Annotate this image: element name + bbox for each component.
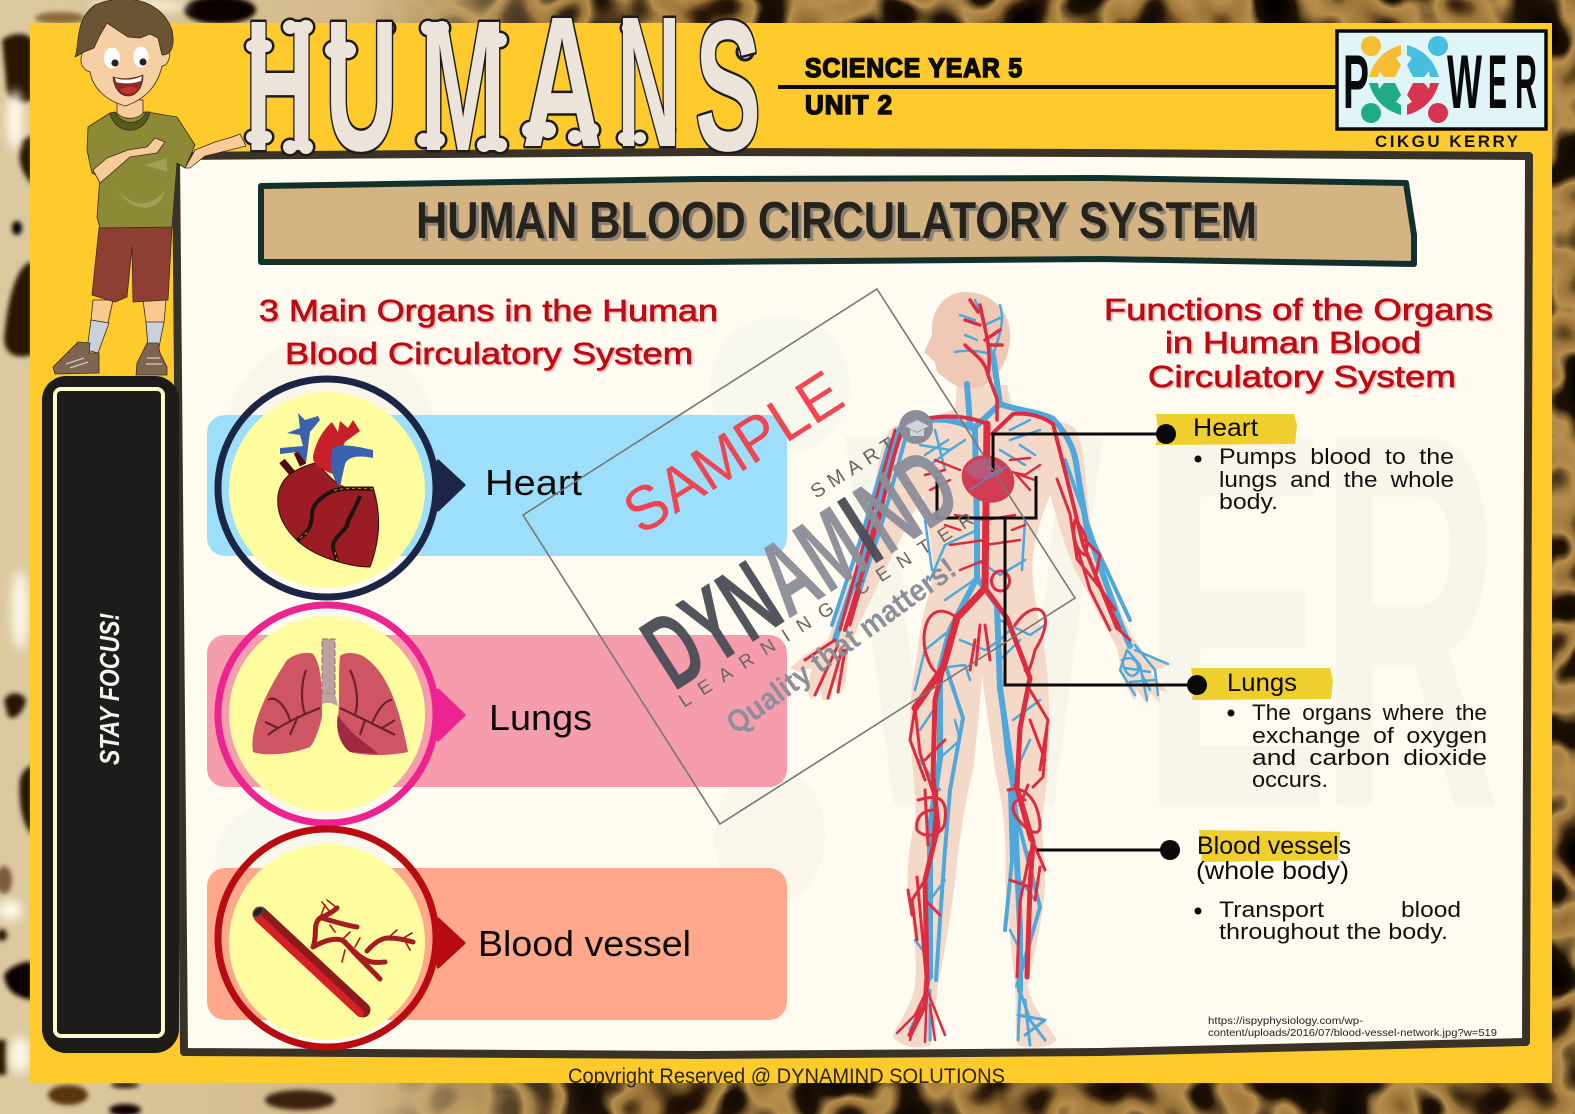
blood vessels description: Transport bbox=[1219, 897, 1325, 922]
blood vessels description bbox=[1219, 897, 1461, 944]
main cream panel bbox=[176, 152, 1529, 1055]
header: science year and unit bbox=[778, 53, 1338, 120]
function: heart bbox=[1156, 414, 1454, 514]
stamp: graduation cap badge bbox=[899, 410, 933, 444]
boy: collar bbox=[110, 112, 150, 130]
sidebar text: STAY FOCUS! bbox=[94, 613, 125, 765]
organ bars bbox=[207, 415, 787, 1020]
image source citation: content/uploads/2016/07/blood-vessel-network.jpg?w=519 bbox=[1208, 1027, 1497, 1039]
logo: four people ring bbox=[1361, 36, 1448, 123]
lungs description: exchange of oxygen bbox=[1252, 723, 1487, 748]
logo caption: CIKGU KERRY bbox=[1375, 132, 1519, 151]
banner title: HUMAN BLOOD CIRCULATORY SYSTEM bbox=[416, 192, 1257, 250]
boy: shirt bbox=[87, 112, 195, 228]
icon: lungs bbox=[252, 639, 408, 755]
head bbox=[924, 292, 1010, 389]
header rule bbox=[778, 85, 1338, 89]
heading: 3 main organs: 3 Main Organs in the Human bbox=[259, 293, 718, 328]
heading: functions of the organs: Circulatory System bbox=[1148, 359, 1456, 394]
boy: open mouth bbox=[113, 75, 143, 96]
blood vessels description: blood bbox=[1401, 897, 1461, 922]
heading: functions of the organs: in Human Blood bbox=[1165, 325, 1421, 360]
stamp: DYNAMIND: DYNAMIND bbox=[623, 426, 978, 711]
boy: outstretched arm bbox=[185, 134, 246, 168]
boy: face and ears bbox=[81, 18, 170, 106]
human body circulatory figure bbox=[790, 292, 1170, 1048]
faint background watermark lettering bbox=[215, 315, 1500, 925]
boy character bbox=[53, 0, 246, 375]
heading: functions of the organs bbox=[1104, 292, 1493, 394]
title: HUMANS in bone lettering bbox=[245, 0, 761, 190]
icon: blood vessel bbox=[251, 900, 413, 1013]
organ card: blood vessel bbox=[218, 829, 691, 1047]
icon: heart bbox=[278, 413, 379, 567]
boy: shorts bbox=[92, 227, 172, 302]
heart description: body. bbox=[1219, 489, 1278, 514]
boy: forearm on chest bbox=[93, 138, 165, 183]
function: heart: Heart bbox=[1193, 414, 1258, 442]
copyright footer: Copyright Reserved @ DYNAMIND SOLUTIONS bbox=[568, 1065, 1005, 1088]
connector: blood vessels leader bbox=[1037, 848, 1170, 852]
stamp outline bbox=[523, 289, 1075, 824]
logo: POWER: W bbox=[1447, 40, 1482, 125]
logo: POWER: E bbox=[1488, 40, 1507, 125]
faint background watermark lettering: E bbox=[1140, 322, 1330, 919]
organ card: heart bbox=[218, 379, 582, 597]
label: Heart: Heart bbox=[485, 462, 582, 503]
lungs description: The organs where the bbox=[1252, 700, 1487, 725]
stamp: SAMPLE: SAMPLE bbox=[611, 358, 855, 548]
red arteries bbox=[805, 300, 1130, 1042]
heading: 3 main organs: Blood Circulatory System bbox=[285, 336, 693, 371]
image source citation: https://ispyphysiology.com/wp- bbox=[1208, 1015, 1364, 1027]
boy: hair bbox=[75, 0, 173, 57]
heading: functions of the organs: Functions of the Organs bbox=[1104, 292, 1493, 327]
heart description: Pumps blood to the bbox=[1219, 444, 1454, 469]
blue veins bbox=[832, 300, 1168, 1045]
boy: eyes bbox=[104, 46, 148, 68]
function: lungs: Lungs bbox=[1227, 669, 1297, 697]
heart description bbox=[1219, 444, 1454, 514]
image source citation bbox=[1208, 1015, 1497, 1039]
stamp: SMART: SMART bbox=[807, 434, 899, 503]
organ card: lungs bbox=[218, 605, 592, 823]
connector: heart leader bbox=[993, 434, 1166, 472]
label: Lungs: Lungs bbox=[489, 697, 592, 738]
heading: 3 main organs bbox=[259, 293, 718, 371]
lungs description bbox=[1252, 700, 1487, 792]
logo: POWER: R bbox=[1515, 40, 1537, 125]
stamp: tagline: Quality that matters! bbox=[720, 551, 963, 741]
body silhouette bbox=[790, 385, 1170, 1048]
connector: lungs bracket and leader bbox=[937, 476, 1197, 685]
lungs description: and carbon dioxide bbox=[1252, 745, 1487, 770]
lungs description: occurs. bbox=[1252, 767, 1328, 792]
heart in chest bbox=[954, 447, 1022, 511]
unit line: UNIT 2 bbox=[805, 90, 893, 120]
sample watermark stamp bbox=[523, 289, 1075, 824]
faint background watermark lettering: W bbox=[845, 322, 1106, 919]
heart description: lungs and the whole bbox=[1219, 467, 1454, 492]
boy: neck bbox=[117, 100, 143, 118]
logo: POWER bbox=[1337, 31, 1546, 129]
function: lungs bbox=[1187, 668, 1487, 792]
blood vessels description: throughout the body. bbox=[1219, 919, 1448, 944]
logo: POWER: P bbox=[1343, 40, 1369, 125]
function: blood vessels: Blood vessels bbox=[1197, 832, 1351, 860]
label: Blood vessel: Blood vessel bbox=[478, 923, 691, 964]
function: blood vessels: (whole body) bbox=[1196, 857, 1349, 885]
stamp: LEARNING CENTER: LEARNING CENTER bbox=[675, 509, 978, 712]
function: blood vessels bbox=[1160, 830, 1461, 944]
title banner bbox=[261, 178, 1414, 264]
subject line: SCIENCE YEAR 5 bbox=[805, 53, 1023, 83]
sidebar: stay focus bbox=[42, 376, 179, 1053]
boy: legs and socks bbox=[53, 300, 167, 375]
